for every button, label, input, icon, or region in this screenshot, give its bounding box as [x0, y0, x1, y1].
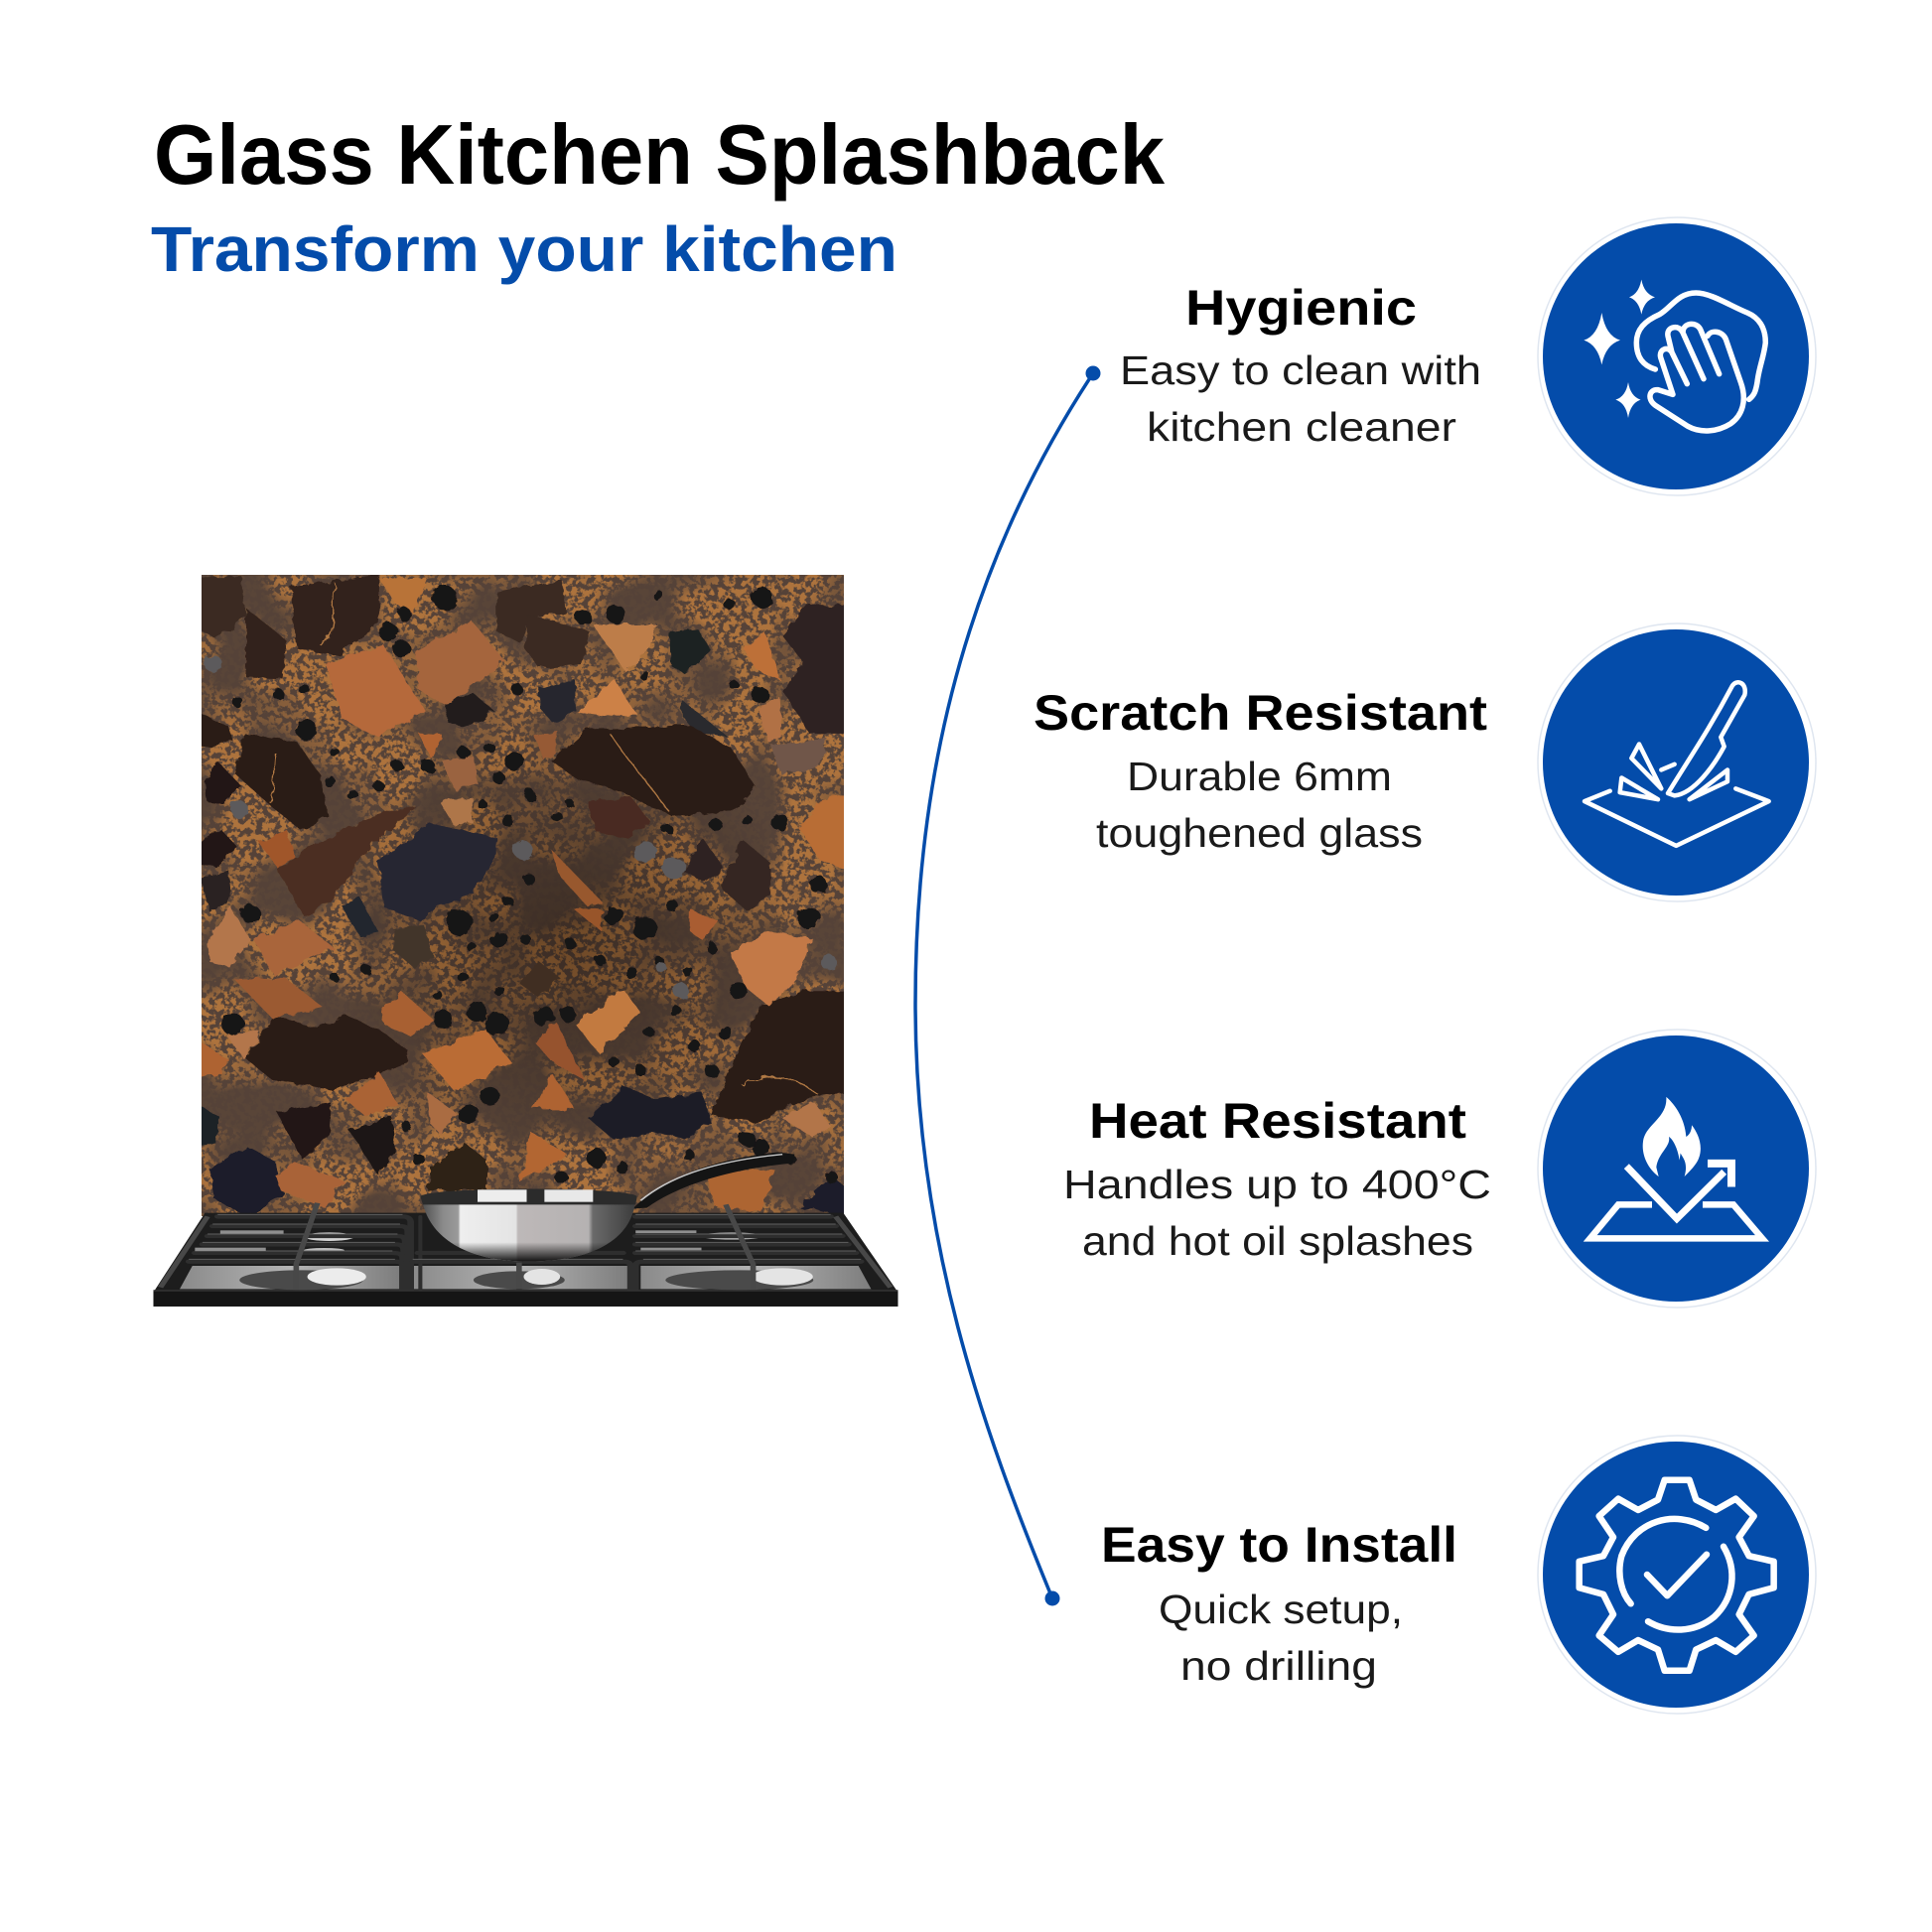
feature text: scratch resistant: Scratch Resistant — [1034, 685, 1487, 741]
grate frame rails — [161, 1203, 891, 1289]
icon: knife scratching glass — [1538, 623, 1816, 901]
connector curve with end dots — [915, 365, 1100, 1606]
feature text: scratch resistant: toughened glass — [1096, 810, 1423, 856]
feature text: hygienic: Easy to clean with — [1120, 347, 1481, 393]
feature text: heat resistant — [1063, 1093, 1491, 1264]
product image: gas hob with burners — [153, 1203, 897, 1307]
feature text: heat resistant: Heat Resistant — [1089, 1093, 1466, 1149]
feature text: scratch resistant: Durable 6mm — [1127, 754, 1392, 799]
burners — [239, 1232, 813, 1290]
product image: marble splashback panel — [198, 575, 849, 1216]
feature text: hygienic — [1120, 280, 1481, 450]
feature text: scratch resistant — [1034, 685, 1487, 856]
feature text: easy to install: no drilling — [1180, 1643, 1377, 1689]
hob front edge — [153, 1290, 897, 1307]
icon: gear with check mark — [1538, 1436, 1816, 1714]
feature text: hygienic: Hygienic — [1185, 280, 1417, 336]
product image: frying pan — [420, 1153, 794, 1262]
grate bars — [189, 1216, 861, 1289]
feature text: easy to install — [1101, 1517, 1457, 1689]
steel hob surfaces — [180, 1266, 871, 1289]
feature text: heat resistant: and hot oil splashes — [1082, 1218, 1473, 1264]
feature text: easy to install: Quick setup, — [1159, 1587, 1403, 1632]
infographic canvas — [151, 122, 1817, 1715]
feature text: easy to install: Easy to Install — [1101, 1517, 1457, 1573]
subtitle: Transform your kitchen — [151, 213, 897, 285]
feature text: hygienic: kitchen cleaner — [1147, 404, 1456, 450]
title: Glass Kitchen Splashback — [154, 108, 1166, 203]
icon: hand wiping with sparkles — [1538, 217, 1816, 495]
icon: flame on glass with arrow — [1538, 1030, 1816, 1308]
feature text: heat resistant: Handles up to 400°C — [1063, 1162, 1491, 1207]
